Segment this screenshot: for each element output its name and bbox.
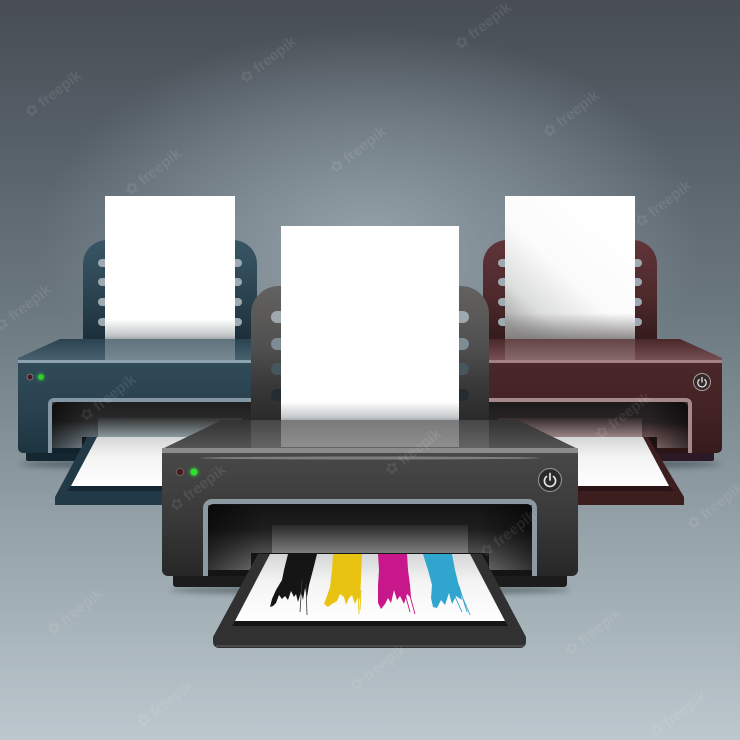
body: maroon xyxy=(418,363,722,453)
printer: blue left xyxy=(18,196,322,505)
LED green: blue xyxy=(38,374,44,380)
LED red: centre xyxy=(176,468,184,476)
printer: black centre xyxy=(162,226,578,648)
lid: blue xyxy=(18,339,322,362)
paper gap dark: centre xyxy=(251,553,489,577)
output paper: blue xyxy=(71,437,269,486)
output paper: maroon xyxy=(471,437,669,486)
output paper: centre xyxy=(235,554,505,621)
yellow ink stroke xyxy=(324,554,362,614)
black ink stroke xyxy=(270,554,317,615)
output tray: maroon xyxy=(455,437,684,505)
power button: centre xyxy=(538,468,562,492)
slot interior: blue xyxy=(52,402,288,450)
cyan ink stroke xyxy=(423,554,470,615)
loaded paper: maroon xyxy=(505,196,635,339)
tray lower band: blue xyxy=(67,486,273,491)
LED glow: blue xyxy=(37,373,45,381)
slot side shade left: centre xyxy=(208,505,263,570)
slot bottom strip: blue xyxy=(52,448,288,453)
watermarks: ✿ freepik xyxy=(477,507,540,561)
floor shadow: centre xyxy=(170,585,570,595)
paper guide back plate: maroon xyxy=(483,240,657,339)
slot interior: maroon xyxy=(452,402,688,450)
power button: maroon xyxy=(694,374,710,390)
loaded paper: centre xyxy=(281,226,459,421)
slot inner lighter panel: centre xyxy=(272,525,468,554)
slot frame: centre xyxy=(203,499,537,576)
LED green: centre xyxy=(191,469,197,475)
paper guide back plate: centre xyxy=(251,286,489,420)
slot frame: blue xyxy=(48,398,292,453)
lid edge: maroon xyxy=(418,360,722,364)
floor shadow: blue xyxy=(20,459,320,469)
printer: maroon right xyxy=(418,196,722,505)
slot side shade: maroon xyxy=(648,402,688,449)
paper reflection: maroon xyxy=(505,339,635,360)
floor shadow: maroon xyxy=(420,459,720,469)
foot: blue xyxy=(26,450,314,461)
paper shade: maroon xyxy=(505,196,635,339)
lid: maroon xyxy=(418,339,722,362)
watermarks: ✿ freepik xyxy=(562,605,625,659)
tray lower band: maroon xyxy=(467,486,674,491)
watermarks: ✿ freepik xyxy=(237,33,300,87)
slot side shade: blue xyxy=(52,402,92,449)
LED red: blue xyxy=(27,374,33,380)
slot centre panel: maroon xyxy=(498,418,642,437)
LED glow: centre xyxy=(189,467,199,477)
tray notch: maroon xyxy=(482,437,657,453)
body highlight: centre xyxy=(200,456,540,460)
slot bottom strip: centre xyxy=(208,570,532,576)
watermarks: ✿ freepik xyxy=(540,87,603,141)
foot: maroon xyxy=(426,450,714,461)
slot interior: centre xyxy=(208,504,532,571)
watermarks: ✿ freepik xyxy=(22,67,85,121)
magenta ink stroke xyxy=(378,554,415,614)
slot bottom strip: maroon xyxy=(452,448,688,453)
watermarks: ✿ freepik xyxy=(167,461,230,515)
watermarks: ✿ freepik xyxy=(134,677,197,731)
guide reflection: centre xyxy=(251,420,489,449)
watermarks: ✿ freepik xyxy=(647,687,710,740)
lid edge: centre xyxy=(162,448,578,454)
slot frame: maroon xyxy=(448,398,692,453)
watermarks: ✿ freepik xyxy=(382,425,445,479)
paper guide back plate: blue xyxy=(83,240,257,339)
guide holes: maroon xyxy=(498,259,642,326)
slot centre panel: blue xyxy=(98,418,242,437)
loaded paper: blue xyxy=(105,196,235,339)
foot: centre xyxy=(173,570,567,587)
lid: centre xyxy=(162,420,578,454)
watermarks: ✿ freepik xyxy=(77,371,140,425)
guide holes: centre xyxy=(271,311,469,401)
body: blue xyxy=(18,363,322,453)
slot side shade right: centre xyxy=(477,505,532,570)
lid edge: blue xyxy=(18,360,322,364)
watermarks: ✿ freepik xyxy=(452,0,515,53)
tray lower band: centre xyxy=(232,621,508,626)
body: centre xyxy=(162,453,578,576)
output tray: centre xyxy=(213,554,526,648)
watermarks: ✿ freepik xyxy=(327,123,390,177)
watermarks: ✿ freepik xyxy=(44,585,107,639)
tray bottom edge: centre xyxy=(216,645,524,647)
watermarks: ✿ freepik xyxy=(592,389,655,443)
watermarks: ✿ freepik xyxy=(347,641,410,695)
paper reflection: centre xyxy=(281,420,459,447)
guide holes: blue xyxy=(98,259,242,326)
tray notch: blue xyxy=(82,437,258,453)
watermarks: ✿ freepik xyxy=(632,177,695,231)
output tray: blue xyxy=(55,437,284,505)
paper reflection: blue xyxy=(105,339,235,360)
watermarks: ✿ freepik xyxy=(122,145,185,199)
